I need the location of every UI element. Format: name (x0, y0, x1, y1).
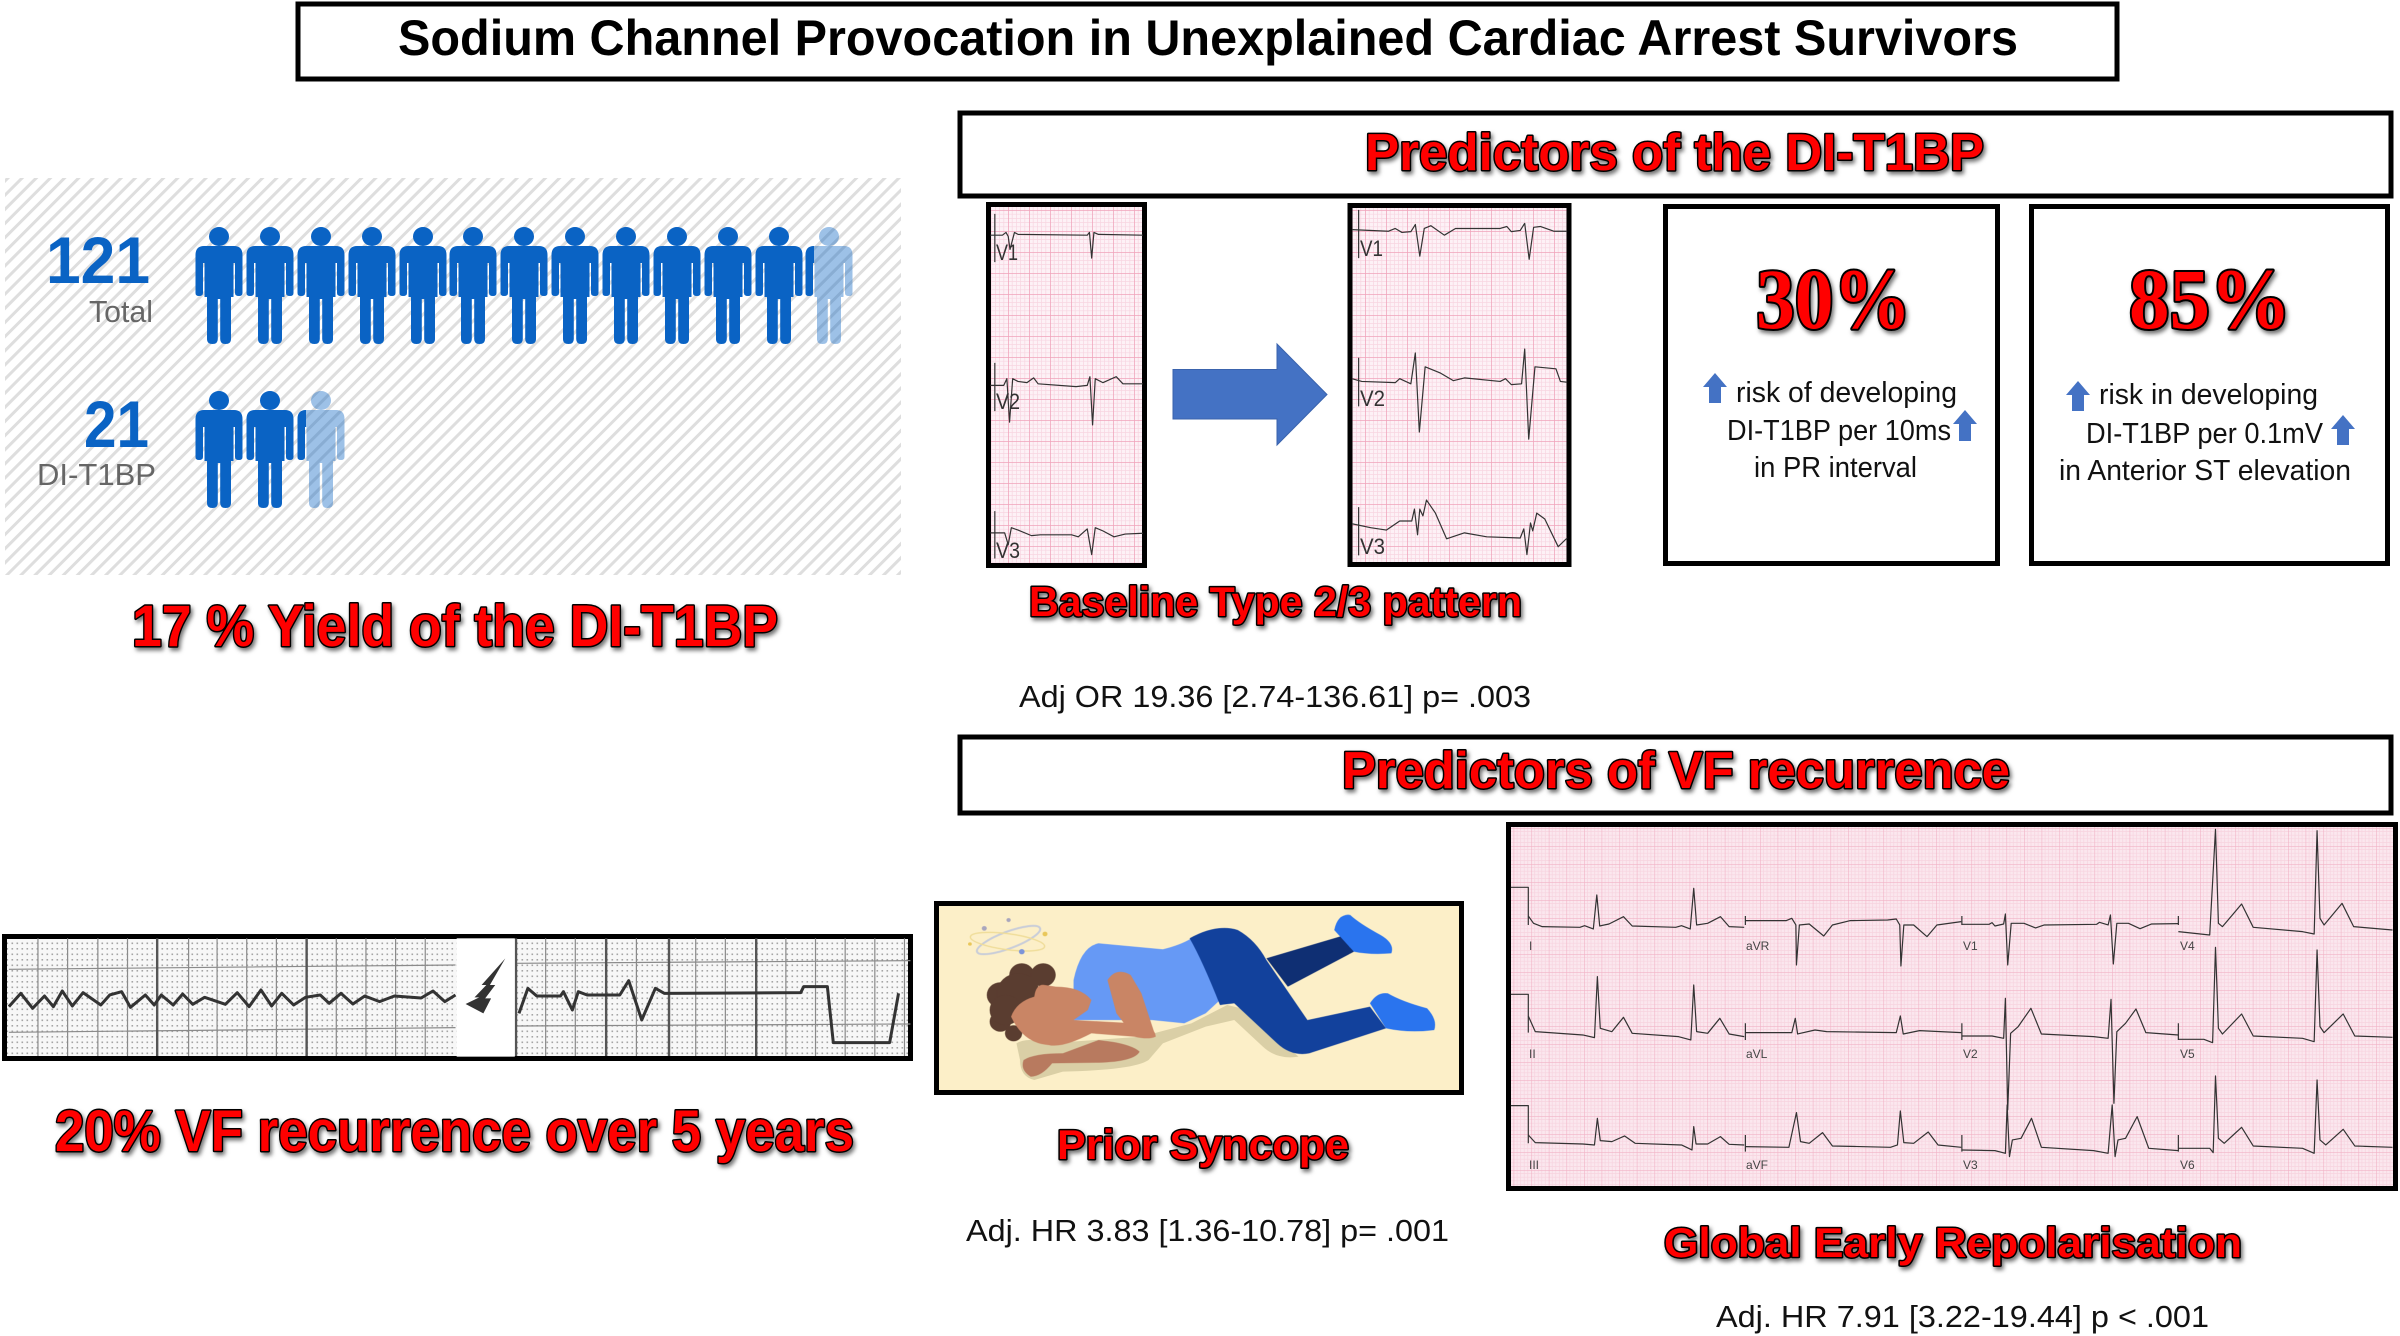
panel: 12-lead ECG: V1 (1963, 939, 1978, 953)
panel: 85% ST elevation: DI-T1BP per 0.1mV (2086, 418, 2324, 450)
early repolarisation statistic: Adj. HR 7.91 [3.22-19.44] p < .001 (1716, 1299, 2209, 1334)
DI-T1BP count: 21 (84, 387, 149, 461)
drug-induced ECG: V1 (1360, 236, 1383, 261)
baseline ECG: V1 (996, 240, 1018, 265)
panel: 85% ST elevation: risk in developing (2099, 379, 2318, 411)
panel: 30% PR interval: in PR interval (1754, 452, 1917, 484)
prior syncope heading: Prior Syncope (1057, 1121, 1349, 1168)
baseline ECG: V2 (996, 389, 1020, 414)
title (298, 4, 2117, 79)
panel: predictors of DI-T1BP header (960, 113, 2391, 196)
panel: 30% PR interval: 30% (1756, 251, 1911, 347)
panel: 12-lead ECG: V4 (2180, 939, 2195, 953)
VF strip (4, 936, 910, 1058)
panel: 12-lead ECG: III (1529, 1158, 1539, 1172)
drug-induced ECG: V3 (1360, 534, 1385, 559)
panel: 85% ST elevation (2032, 206, 2388, 564)
panel: 12-lead ECG: aVR (1746, 939, 1770, 953)
panel: 85% ST elevation: in Anterior ST elevation (2059, 455, 2351, 487)
baseline ECG (988, 204, 1144, 566)
panel: yield pictogram (5, 178, 901, 575)
VF recurrence heading: 20% VF recurrence over 5 years (55, 1099, 854, 1164)
panel: 12-lead ECG: V3 (1963, 1158, 1978, 1172)
baseline pattern heading: Baseline Type 2/3 pattern (1029, 578, 1522, 625)
panel: 85% ST elevation: 85% (2129, 251, 2291, 347)
panel: 12-lead ECG: aVL (1746, 1047, 1768, 1061)
baseline pattern statistic: Adj OR 19.36 [2.74-136.61] p= .003 (1019, 679, 1531, 714)
drug-induced ECG (1350, 206, 1569, 564)
panel: 12-lead ECG: I (1529, 939, 1532, 953)
DI-T1BP label: DI-T1BP (37, 457, 156, 492)
panel: 12-lead ECG: V6 (2180, 1158, 2195, 1172)
early repolarisation heading: Global Early Repolarisation (1664, 1219, 2242, 1266)
title: Sodium Channel Provocation in Unexplained Cardiac Arrest Survivors (398, 10, 2018, 66)
row of people: DI-T1BP (196, 391, 344, 508)
baseline ECG: V3 (996, 538, 1020, 563)
arrow: baseline to drug-induced (1173, 344, 1327, 445)
panel: 30% PR interval (1666, 206, 1998, 564)
panel: predictors of VF recurrence header (960, 737, 2391, 813)
panel: 12-lead ECG (1508, 824, 2396, 1188)
total label: Total (89, 294, 153, 329)
panel: 30% PR interval: DI-T1BP per 10ms (1727, 415, 1951, 447)
icon: shock bolt (466, 958, 505, 1013)
icon: up arrow (1703, 373, 1727, 403)
row of people: total (196, 227, 852, 344)
icon: up arrow (2066, 381, 2090, 411)
panel: syncope illustration (936, 904, 1462, 1092)
total count: 121 (46, 223, 150, 297)
panel: 12-lead ECG: II (1529, 1047, 1536, 1061)
prior syncope statistic: Adj. HR 3.83 [1.36-10.78] p= .001 (966, 1213, 1449, 1248)
drug-induced ECG: V2 (1360, 386, 1385, 411)
icon: up arrow (2331, 415, 2355, 445)
panel: 12-lead ECG: V5 (2180, 1047, 2195, 1061)
panel: 30% PR interval: risk of developing (1736, 377, 1957, 409)
yield heading: 17 % Yield of the DI-T1BP (132, 594, 778, 659)
panel: predictors of VF recurrence header: Predictors of VF recurrence (1342, 742, 2010, 800)
icon: up arrow (1953, 410, 1977, 441)
panel: predictors of DI-T1BP header: Predictors of the DI-T1BP (1365, 124, 1984, 182)
panel: 12-lead ECG: V2 (1963, 1047, 1978, 1061)
panel: 12-lead ECG: aVF (1746, 1158, 1768, 1172)
